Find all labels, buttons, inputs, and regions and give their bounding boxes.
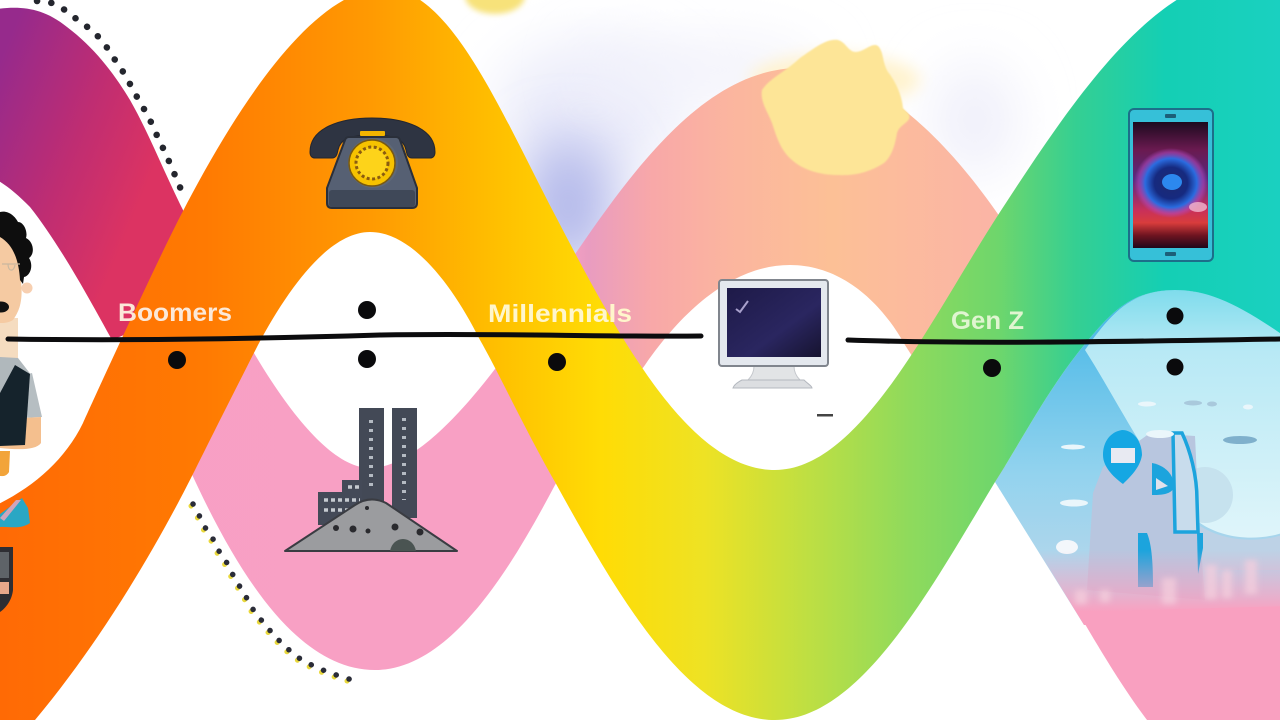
dotted curve: top left [37,1,182,192]
pink ribbon: middle [190,68,1040,670]
timeline line: right [848,339,1280,342]
icon: desktop monitor [719,280,833,416]
timeline line: left [8,334,701,340]
pink ribbon: bottom right [1078,606,1280,720]
timeline dots [168,301,1184,377]
panel: future city [995,290,1280,625]
icon: industrial towers and mound [285,408,457,551]
label: Boomers: Boomers [118,299,232,327]
plum ribbon: top left [0,8,186,340]
person illustration [0,212,42,614]
city towers [1056,430,1205,600]
clouds and planes [1060,400,1257,506]
dotted curve: lower left [191,504,356,683]
icon: rotary phone [310,118,435,208]
icon: smartphone [1129,109,1213,261]
label: Gen Z: Gen Z [951,307,1024,335]
label: Millennials: Millennials [488,300,632,328]
pink haze skyline [1038,335,1280,625]
yellow blob [762,40,909,175]
